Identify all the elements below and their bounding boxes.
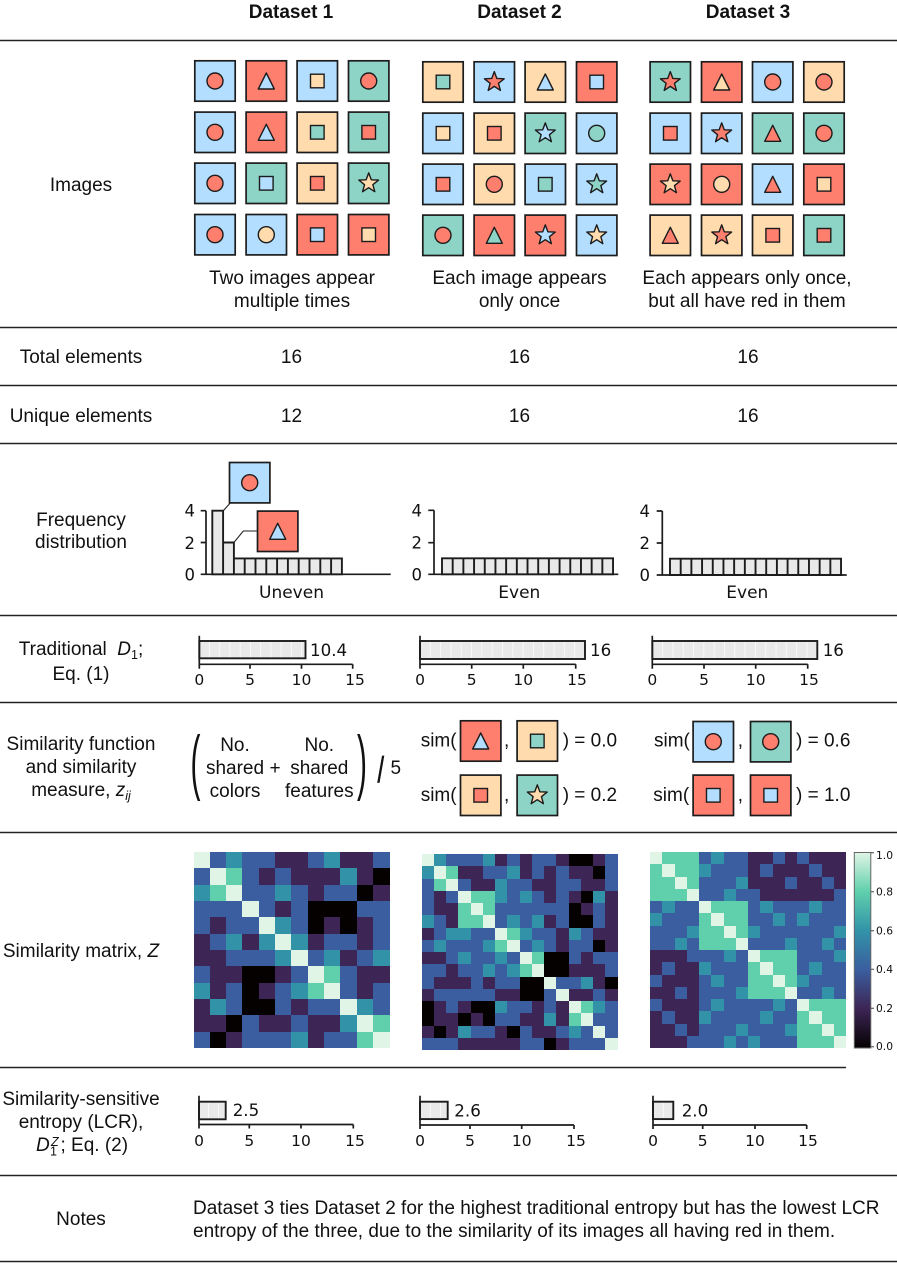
value label: 2.0 <box>682 1101 708 1121</box>
tile: blue, red star <box>474 62 514 102</box>
caption: Dataset 3 images: but all have red in them <box>648 291 846 312</box>
axis numbers <box>648 1132 818 1150</box>
axis title: Even <box>498 583 540 603</box>
left parenthesis: ( <box>190 722 200 802</box>
axis numbers: 10 <box>291 1132 311 1150</box>
tile: blue, red circle <box>752 62 793 102</box>
image grid: Dataset 2 <box>423 62 617 255</box>
tile: tan, red circle <box>474 164 514 204</box>
row label: similarity function <box>7 734 155 803</box>
axis numbers <box>184 502 195 585</box>
row label: traditional entropy <box>19 639 143 685</box>
row label: similarity-sensitive entropy: 1 <box>50 1144 57 1158</box>
axis numbers: 4 <box>412 501 422 520</box>
histogram bars <box>212 511 342 574</box>
colorbar: 1.0 <box>876 849 893 862</box>
example: sim = 0.0: , <box>504 731 509 752</box>
row label: similarity function: ij <box>125 789 132 803</box>
row label: similarity function: measure, z <box>31 780 125 801</box>
plus sign: + <box>269 758 281 779</box>
tile: blue, tan square <box>423 113 463 154</box>
tile: blue, red circle <box>195 61 235 101</box>
axis numbers: 15 <box>345 1132 365 1150</box>
bar chart: traditional D1, Dataset 1 <box>194 636 365 689</box>
tile: blue, tan square <box>297 61 338 101</box>
numerator: shared colors: colors <box>210 781 260 802</box>
tile: tan, red square <box>474 113 514 154</box>
axis numbers: 10 <box>745 1132 765 1150</box>
caption: Dataset 3 images: Each appears only once, <box>642 268 852 289</box>
tile: teal, red star <box>650 62 690 102</box>
header row: dataset titles <box>249 2 790 23</box>
division slash: / <box>378 751 384 790</box>
header row: dataset titles: Dataset 2 <box>477 2 562 23</box>
tile: red, blue triangle <box>246 112 286 152</box>
numerator: shared colors <box>206 735 264 802</box>
tile: blue, red square <box>423 164 463 204</box>
tile: red, blue square <box>576 62 617 102</box>
bar chart: traditional D1, Dataset 2 <box>415 636 611 689</box>
axis numbers: 5 <box>465 1132 475 1150</box>
histogram bars <box>670 559 841 575</box>
example: sim = 0.2: ) = 0.2 <box>563 785 617 806</box>
tile: red, tan square <box>804 164 844 204</box>
example: sim = 0.6: sim( <box>654 731 691 752</box>
axis numbers: 10 <box>512 1132 532 1150</box>
row label: similarity function: Similarity function <box>7 734 155 755</box>
colorbar: 0.0 <box>876 1040 893 1053</box>
row: unique elements: 16 <box>509 406 530 427</box>
axis numbers <box>647 671 819 689</box>
tile: teal, red circle <box>423 215 463 256</box>
axis numbers: 4 <box>184 502 195 521</box>
axis numbers: 15 <box>799 671 819 689</box>
tile: blue, red circle <box>195 163 235 204</box>
tile: blue, red square <box>650 113 690 154</box>
caption: Dataset 1 images: multiple times <box>234 291 350 312</box>
axis numbers: 5 <box>698 1132 708 1150</box>
numerator: shared features: No. <box>305 735 334 756</box>
row label: Images: Images <box>50 175 112 196</box>
axis numbers <box>415 1132 586 1150</box>
value label: 10.4 <box>310 640 347 660</box>
value label: 2.5 <box>233 1100 259 1120</box>
row label: similarity-sensitive entropy: Similarity-sensitive <box>2 1089 160 1110</box>
image grid: Dataset 3 <box>650 62 844 255</box>
row label: similarity-sensitive entropy <box>2 1089 160 1158</box>
row label: notes: Notes <box>56 1209 106 1230</box>
axis numbers: 15 <box>798 1132 818 1150</box>
axis numbers <box>640 502 650 585</box>
row label: similarity-sensitive entropy: Z <box>50 1135 59 1149</box>
axis numbers: 0 <box>412 565 422 584</box>
bar chart: LCR entropy, Dataset 1 <box>194 1096 365 1150</box>
tile: tan, red square <box>752 215 793 256</box>
axis numbers: 0 <box>194 671 204 689</box>
notes text: Dataset 3 ties Dataset 2 for the highest traditional entropy but has the lowest LCR <box>193 1198 880 1219</box>
histogram: Dataset 2 (even) <box>412 501 618 603</box>
colorbar: 0.8 <box>876 886 893 898</box>
tile: teal, red triangle <box>752 113 793 154</box>
value label: 16 <box>590 640 611 660</box>
tile: tan, red triangle <box>650 215 690 256</box>
axis numbers: 0 <box>194 1132 204 1150</box>
tile: blue, red circle <box>195 112 235 152</box>
tile: red, teal triangle <box>474 215 514 256</box>
value label: 16 <box>823 640 844 660</box>
example: sim = 0.0: sim( <box>421 731 457 752</box>
callout leader lines <box>223 503 257 542</box>
similarity formula <box>190 722 401 802</box>
heatmap: similarity matrix, Dataset 1 <box>194 852 390 1048</box>
example: sim = 0.2: , <box>504 785 509 806</box>
row label: frequency distribution: Frequency <box>36 510 126 531</box>
axis title: Uneven <box>259 583 324 603</box>
row: total elements: Total elements <box>20 347 142 368</box>
heatmap: similarity matrix, Dataset 2 <box>422 854 618 1050</box>
axis numbers: 2 <box>640 534 650 553</box>
header row: dataset titles: Dataset 3 <box>706 2 790 23</box>
tile: red, blue square <box>297 214 338 255</box>
tile: blue, tan star <box>576 215 617 256</box>
caption: Dataset 2 images: Each image appears <box>432 268 607 289</box>
axis numbers <box>194 671 365 689</box>
tile: teal, red square <box>348 112 389 152</box>
tile: tan, red circle <box>804 62 844 102</box>
caption: Dataset 2 images: only once <box>479 291 560 312</box>
header row: dataset titles: Dataset 1 <box>249 2 334 23</box>
axis numbers: 0 <box>415 671 425 689</box>
axis numbers: 5 <box>467 671 477 689</box>
numerator: shared colors: No. <box>220 735 250 756</box>
axis numbers: 2 <box>184 534 195 553</box>
image grid: Dataset 1 <box>195 61 389 255</box>
icon: most frequent image <box>230 462 270 503</box>
numerator: shared colors: shared <box>206 758 264 779</box>
similarity examples: Dataset 2 <box>421 721 617 816</box>
example: sim = 0.6: , <box>738 731 743 752</box>
axis numbers: 5 <box>244 1132 254 1150</box>
example: sim = 0.0 <box>421 721 617 761</box>
tile: tan, blue triangle <box>525 62 566 102</box>
numerator: shared features: shared <box>290 758 348 779</box>
tile: tan, red square <box>297 163 338 204</box>
row: total elements: 16 <box>737 347 759 368</box>
tile: red, tan square <box>348 214 389 255</box>
histogram bars <box>442 558 613 574</box>
row: unique elements: Unique elements <box>10 406 152 427</box>
bar chart: traditional D1, Dataset 3 <box>647 636 844 689</box>
row label: similarity-sensitive entropy: D <box>36 1135 50 1156</box>
numerator: shared features: features <box>285 781 354 802</box>
heatmap: similarity matrix, Dataset 3 <box>650 852 846 1048</box>
example: sim = 1.0 <box>653 775 850 816</box>
row: unique elements <box>10 406 759 427</box>
tile: red, tan circle <box>702 164 742 204</box>
tile: red, blue triangle <box>246 61 286 101</box>
tile: red, tan star <box>650 164 690 204</box>
example: sim = 0.2: sim( <box>421 785 457 806</box>
axis numbers: 10 <box>292 671 311 689</box>
tile: blue, red triangle <box>752 164 793 204</box>
axis numbers: 0 <box>415 1132 425 1150</box>
row label: traditional entropy: Eq. (1) <box>52 664 110 685</box>
example: sim = 0.6 <box>654 722 850 762</box>
axis numbers <box>415 671 587 689</box>
tile: blue, teal circle <box>576 113 617 154</box>
similarity examples: Dataset 3 <box>653 722 850 816</box>
axis numbers: 10 <box>513 671 533 689</box>
caption: Dataset 1 images <box>209 268 376 312</box>
example: sim = 0.0: ) = 0.0 <box>563 731 617 752</box>
axis numbers: 10 <box>746 671 766 689</box>
tile: blue, red circle <box>195 214 235 255</box>
example: sim = 1.0: ) = 1.0 <box>796 785 850 806</box>
value label: 2.6 <box>454 1101 481 1121</box>
row label: traditional entropy: 1 <box>131 648 138 662</box>
axis numbers: 5 <box>699 671 709 689</box>
tile: blue, teal square <box>525 164 566 204</box>
icon: second most frequent image <box>258 511 298 552</box>
axis numbers: 2 <box>412 534 422 553</box>
colorbar: 0.2 <box>876 1002 893 1015</box>
tile: teal, tan star <box>348 163 389 204</box>
right parenthesis: ) <box>357 722 367 802</box>
caption: Dataset 1 images: Two images appear <box>209 268 376 289</box>
tile: tan, teal square <box>423 62 463 102</box>
divisor: 5 <box>390 758 401 779</box>
tile: blue, tan circle <box>246 214 286 255</box>
caption: Dataset 3 images <box>642 268 852 312</box>
example: sim = 0.2 <box>421 775 617 816</box>
row: unique elements: 16 <box>737 406 759 427</box>
tile: teal, blue square <box>246 163 286 204</box>
colorbar: 0.6 <box>876 924 893 938</box>
row label: traditional entropy: Traditional D <box>19 639 131 660</box>
tile: red, tan triangle <box>702 62 742 102</box>
example: sim = 0.6: ) = 0.6 <box>796 731 850 752</box>
bar chart: LCR entropy, Dataset 2 <box>415 1096 586 1150</box>
row label: similarity function: and similarity <box>26 757 137 778</box>
bar chart: LCR entropy, Dataset 3 <box>648 1096 818 1150</box>
tile: teal, red square <box>804 215 844 256</box>
row label: similarity matrix: Similarity matrix, Z <box>3 941 161 962</box>
tile: tan, red star <box>702 215 742 256</box>
axis numbers: 0 <box>640 566 650 585</box>
row label: frequency distribution: distribution <box>35 532 127 553</box>
histogram: Dataset 1 (uneven) <box>184 462 391 603</box>
row label: similarity-sensitive entropy: ; Eq. (2) <box>60 1135 128 1156</box>
colorbar: 0.4 <box>876 963 893 976</box>
tile: red, blue star <box>525 215 566 256</box>
numerator: shared features <box>285 735 354 802</box>
tile: blue, teal star <box>576 164 617 204</box>
notes text: entropy of the three, due to the similarity of its images all having red in them. <box>193 1221 835 1242</box>
axis numbers: 15 <box>566 1132 586 1150</box>
histogram: Dataset 3 (even) <box>640 502 847 603</box>
row: total elements: 16 <box>281 347 302 368</box>
axis numbers: 0 <box>648 1132 658 1150</box>
axis title: Even <box>726 583 768 603</box>
colorbar <box>854 849 893 1053</box>
axis numbers: 4 <box>640 502 650 521</box>
tile: tan, teal square <box>297 112 338 152</box>
row label: traditional entropy: ; <box>138 639 143 660</box>
axis numbers: 5 <box>245 671 255 689</box>
tile: teal, red circle <box>804 113 844 154</box>
caption: Dataset 2 images <box>432 268 607 312</box>
notes text <box>193 1198 880 1242</box>
row: unique elements: 12 <box>281 406 302 427</box>
tile: teal, red circle <box>348 61 389 101</box>
axis numbers: 0 <box>184 566 195 585</box>
axis numbers: 0 <box>647 671 657 689</box>
row: total elements <box>20 347 759 368</box>
axis numbers <box>412 501 422 584</box>
axis numbers <box>194 1132 365 1150</box>
tile: teal, blue star <box>525 113 566 154</box>
example: sim = 1.0: sim( <box>653 785 690 806</box>
row label: frequency distribution <box>35 510 127 553</box>
example: sim = 1.0: , <box>738 785 743 806</box>
row: total elements: 16 <box>509 347 530 368</box>
axis numbers: 15 <box>567 671 587 689</box>
tile: blue, red star <box>702 113 742 154</box>
row label: similarity-sensitive entropy: entropy (LCR), <box>19 1112 143 1133</box>
axis numbers: 15 <box>345 671 365 689</box>
